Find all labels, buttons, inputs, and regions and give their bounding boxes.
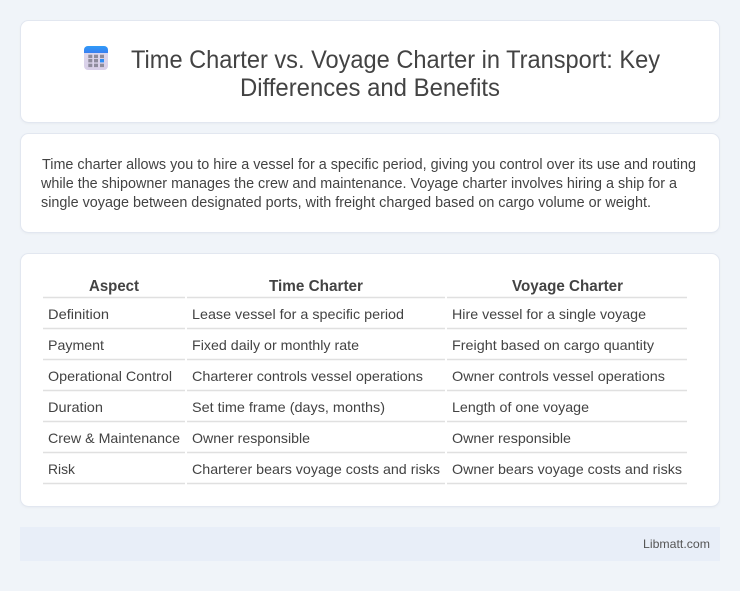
row: duration: Duration (48, 399, 103, 415)
row: duration: Set time frame (days, months) (192, 399, 385, 415)
row: payment: Fixed daily or monthly rate (192, 337, 359, 353)
row: crew and maintenance: Owner responsible (192, 430, 310, 446)
row: risk (48, 461, 682, 477)
title (131, 46, 660, 102)
table header (89, 278, 623, 295)
row: duration: Length of one voyage (452, 399, 589, 415)
row: payment (48, 337, 654, 353)
row: operational control: Charterer controls vessel operations (192, 368, 423, 384)
text block: introduction: Time charter allows you to hire a vessel for a specific period, giving you control over its use and routing (42, 157, 696, 173)
row: definition: Hire vessel for a single voyage (452, 306, 646, 322)
row: operational control: Operational Control (48, 368, 172, 384)
text block: introduction: single voyage between designated ports, with freight charged based on cargo volume or weight. (41, 195, 651, 211)
title: Differences and Benefits (240, 74, 500, 102)
panel: footer (20, 527, 720, 561)
row: crew and maintenance (48, 430, 571, 446)
row: definition: Definition (48, 306, 109, 322)
row: crew and maintenance: Crew & Maintenance (48, 430, 180, 446)
row: operational control: Owner controls vessel operations (452, 368, 665, 384)
row: crew and maintenance: Owner responsible (452, 430, 571, 446)
title: Time Charter vs. Voyage Charter in Transport: Key (131, 46, 660, 74)
row: risk: Risk (48, 461, 76, 477)
panel: introduction (20, 134, 720, 232)
row: risk: Charterer bears voyage costs and risks (192, 461, 440, 477)
table header: Time Charter (269, 278, 363, 295)
row: operational control (48, 368, 665, 384)
row: payment: Payment (48, 337, 104, 353)
panel: comparison table (20, 254, 720, 506)
footer credit: Libmatt.com (643, 537, 710, 551)
panel: title card (20, 20, 720, 122)
row: duration (48, 399, 589, 415)
text block: introduction: while the shipowner manages the crew and maintenance. Voyage charter involves hiring a ship for a (40, 176, 678, 192)
icon: calendar (84, 46, 108, 70)
row: definition (48, 306, 646, 322)
table header: Aspect (89, 278, 140, 295)
row: risk: Owner bears voyage costs and risks (452, 461, 682, 477)
row: payment: Freight based on cargo quantity (452, 337, 654, 353)
row: definition: Lease vessel for a specific period (192, 306, 404, 322)
table header: Voyage Charter (512, 278, 623, 295)
text block: introduction (40, 157, 696, 211)
